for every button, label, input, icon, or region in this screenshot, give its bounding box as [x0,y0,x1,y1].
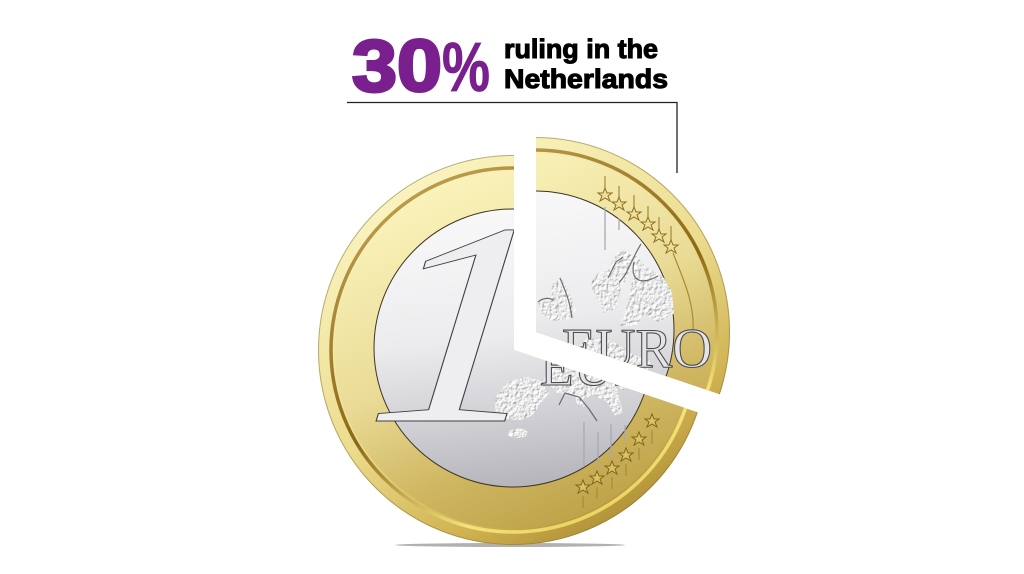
heading [352,26,668,107]
coin: separated 30 percent slice [536,137,730,394]
infographic canvas [318,38,730,547]
heading figure: 30% [352,26,490,107]
heading label: Netherlands [504,64,668,94]
heading figure: 30%: 30 [352,26,442,107]
coin: main piece with 70 percent [318,155,708,545]
leader line from heading to slice [347,102,677,173]
numeral 1 on coin: 1 [325,163,606,484]
coin ground shadow [395,543,625,547]
heading figure: 30%: % [442,28,490,106]
heading label: ruling in the [504,34,658,64]
heading label [504,34,668,94]
coin lettering: slice: EURO [562,318,712,380]
coin lettering: main piece: EURO [540,336,690,398]
